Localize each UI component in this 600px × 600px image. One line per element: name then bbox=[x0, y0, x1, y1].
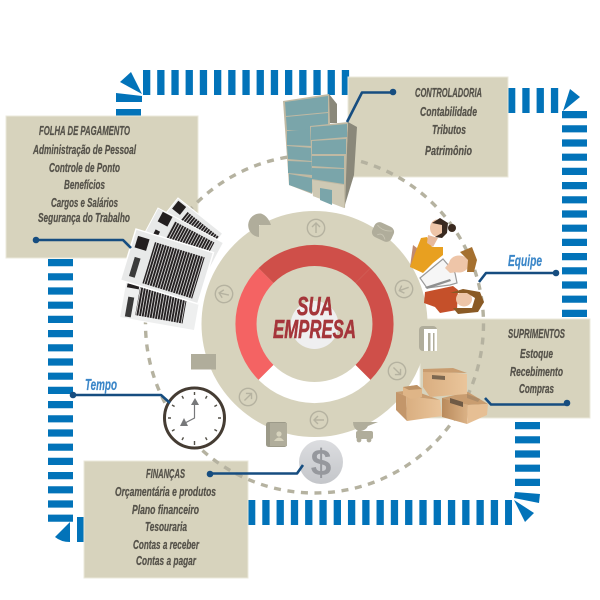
icon: dollar coin: $ bbox=[311, 442, 332, 483]
text: controladoria: Tributos bbox=[432, 123, 466, 137]
blue dashed frame bbox=[55, 72, 580, 542]
icon: cart bbox=[353, 422, 378, 442]
text: financas: Tesouraria bbox=[145, 520, 187, 534]
connector: financas bbox=[207, 465, 303, 477]
icon: dollar coin bbox=[299, 440, 343, 484]
title: sua empresa bbox=[273, 291, 356, 344]
panel: folha de pagamento bbox=[6, 116, 198, 258]
text: folha de pagamento bbox=[32, 124, 136, 225]
label: equipe: Equipe bbox=[508, 253, 542, 270]
icon: buildings bbox=[283, 94, 357, 208]
title: sua empresa: EMPRESA bbox=[273, 314, 356, 344]
panel: financas bbox=[84, 461, 248, 578]
connector: controladoria bbox=[347, 89, 396, 122]
connector: equipe bbox=[479, 270, 559, 282]
text: financas bbox=[115, 467, 216, 568]
title: sua empresa: SUA bbox=[297, 291, 333, 321]
text: suprimentos: Estoque bbox=[520, 347, 553, 361]
text: folha de pagamento: Administração de Pessoal bbox=[32, 143, 136, 157]
panel: suprimentos bbox=[420, 319, 590, 418]
connector: tempo bbox=[70, 392, 170, 403]
text: folha de pagamento: Segurança do Trabalho bbox=[38, 211, 130, 225]
central disc bbox=[202, 211, 428, 437]
icon: payroll sheets bbox=[120, 198, 223, 331]
text: suprimentos: Recebimento bbox=[510, 365, 563, 379]
connector: suprimentos bbox=[485, 398, 570, 406]
icon: boxes bbox=[396, 368, 488, 424]
donut ring bbox=[235, 245, 394, 403]
icon: door bbox=[419, 326, 437, 351]
icon: team bbox=[410, 218, 484, 314]
text: controladoria: Contabilidade bbox=[420, 105, 477, 119]
arrow icons on disc bbox=[214, 219, 415, 429]
icon: contact book bbox=[266, 422, 287, 447]
text: controladoria: CONTROLADORIA bbox=[415, 86, 482, 100]
text: suprimentos: SUPRIMENTOS bbox=[508, 327, 565, 341]
text: folha de pagamento: FOLHA DE PAGAMENTO bbox=[39, 124, 130, 138]
dashed orbit bbox=[146, 155, 484, 493]
text: folha de pagamento: Controle de Ponto bbox=[49, 161, 120, 175]
icon: pie bbox=[248, 213, 271, 237]
text: suprimentos bbox=[508, 327, 565, 396]
text: financas: Plano financeiro bbox=[132, 503, 199, 517]
text: folha de pagamento: Cargos e Salários bbox=[51, 196, 118, 210]
text: financas: FINANÇAS bbox=[146, 467, 185, 481]
connector: folha bbox=[33, 237, 131, 248]
text: suprimentos: Compras bbox=[519, 382, 554, 396]
label: tempo: Tempo bbox=[85, 377, 117, 394]
icon: pillow bbox=[370, 220, 396, 244]
text: financas: Orçamentária e produtos bbox=[115, 485, 216, 499]
text: controladoria: Patrimônio bbox=[425, 144, 472, 158]
icon: clock bbox=[164, 388, 224, 448]
text: folha de pagamento: Benefícios bbox=[64, 178, 105, 192]
text: controladoria bbox=[415, 86, 482, 158]
text: financas: Contas a pagar bbox=[136, 554, 197, 568]
icon: briefcase bbox=[191, 354, 216, 370]
center circle bbox=[290, 301, 338, 349]
panel: controladoria bbox=[348, 77, 508, 177]
text: financas: Contas a receber bbox=[133, 538, 200, 552]
